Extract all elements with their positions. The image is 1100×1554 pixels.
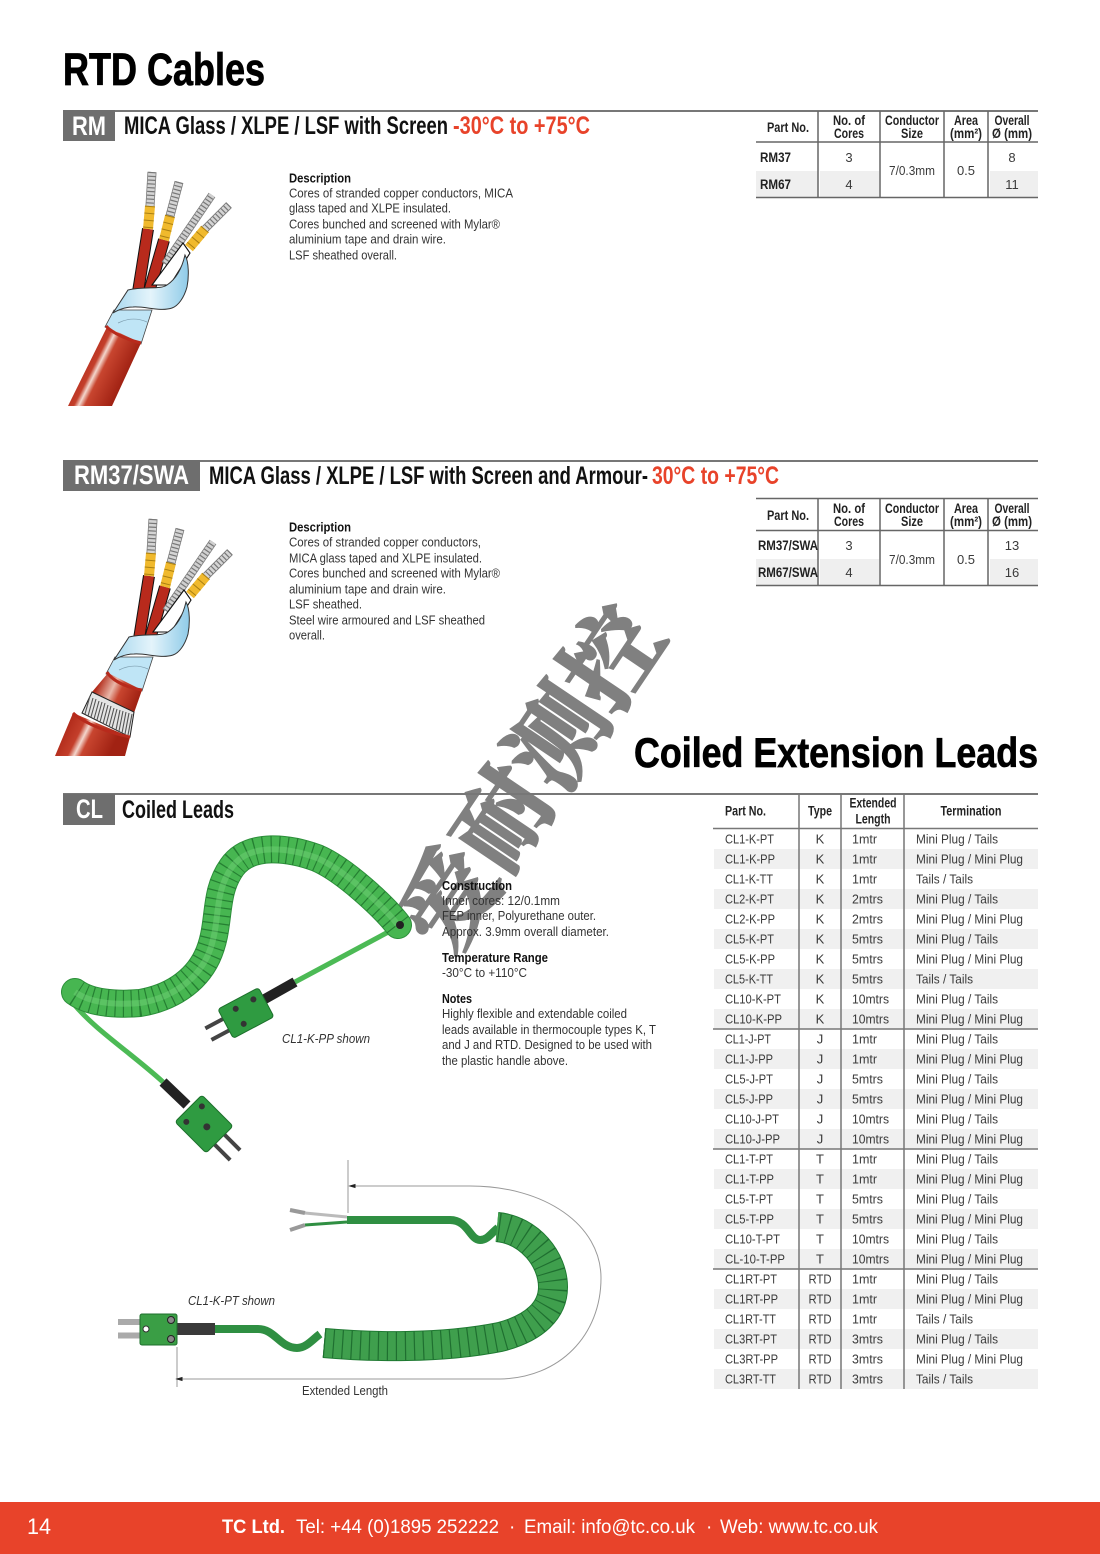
table rows: Mini Plug / Tails (916, 931, 998, 946)
table: RM37/SWA: Conductor (885, 501, 940, 516)
description: RM37/SWA: aluminium tape and drain wire. (289, 582, 446, 596)
table rows: RTD (808, 1371, 832, 1386)
table rows: Mini Plug / Mini Plug (916, 1131, 1023, 1146)
table: RM37/SWA: Size (901, 514, 923, 529)
table rows: Mini Plug / Tails (916, 1231, 998, 1246)
connector: upper plug (200, 988, 274, 1048)
description: CL: Temperature Range (442, 950, 548, 965)
table rows: Mini Plug / Tails (916, 891, 998, 906)
table: RM37/SWA: No. of (833, 501, 865, 516)
table rows: 5mtrs (852, 1071, 883, 1086)
table rows: Tails / Tails (916, 971, 973, 986)
table: RM: Ø (mm) (992, 126, 1032, 141)
table: RM: RM67 (760, 177, 791, 192)
description: RM37/SWA: MICA glass taped and XLPE insulated. (289, 550, 482, 566)
table rows: CL1-T-PP (725, 1171, 774, 1186)
table rows: T (816, 1151, 824, 1166)
table rows: K (816, 931, 825, 946)
table: RM: Overall (994, 113, 1030, 128)
table rows: 1mtr (852, 831, 878, 846)
section header: RM: MICA Glass / XLPE / LSF with Screen (124, 112, 448, 140)
description: RM: Cores bunched and screened with Mylar® (289, 216, 500, 232)
table rows: Mini Plug / Mini Plug (916, 1251, 1023, 1266)
description: CL: Construction (442, 878, 512, 893)
description: RM: Cores of stranded copper conductors, MICA (289, 186, 513, 200)
description: RM (289, 170, 513, 262)
table rows: T (816, 1191, 824, 1206)
footer bar: Email: info@tc.co.uk (524, 1517, 695, 1538)
table rows: T (816, 1171, 824, 1186)
table rows: RTD (808, 1331, 832, 1346)
table rows: CL2-K-PP (725, 911, 775, 926)
table rows: 10mtrs (852, 1111, 889, 1126)
footer bar (0, 1502, 1100, 1554)
table: RM: 3 (845, 150, 853, 165)
footer bar: 14 (27, 1514, 51, 1539)
table rows: CL5-J-PP (725, 1091, 773, 1106)
table: RM37/SWA: 7/0.3mm (889, 552, 935, 567)
table: RM37/SWA: Area (954, 501, 978, 516)
description: CL: and J and RTD. Designed to be used with (442, 1037, 652, 1052)
table: RM (756, 111, 1038, 198)
table rows: 10mtrs (852, 1251, 889, 1266)
table: RM: Cores (834, 126, 864, 141)
description: CL: Highly flexible and extendable coiled (442, 1006, 627, 1021)
table rows: K (816, 871, 825, 886)
table rows: K (816, 971, 825, 986)
label: Extended Length: Extended Length (302, 1383, 388, 1398)
description: RM: LSF sheathed overall. (289, 248, 397, 262)
table rows: RTD (808, 1311, 832, 1326)
table rows: CL1-K-PP (725, 851, 775, 866)
table: RM: No. of (833, 113, 865, 128)
table rows: CL10-J-PP (725, 1131, 780, 1146)
section header: RM37/SWA: 30°C to +75°C (652, 462, 779, 490)
description: CL: the plastic handle above. (442, 1053, 568, 1068)
coil (324, 1227, 553, 1346)
table: RM: Conductor (885, 113, 940, 128)
section header: CL: CL (76, 794, 103, 824)
table rows: CL-10-T-PP (725, 1251, 785, 1266)
table rows: 5mtrs (852, 1211, 883, 1226)
table: RM: Size (901, 126, 923, 141)
table rows: 1mtr (852, 1051, 878, 1066)
description: RM: aluminium tape and drain wire. (289, 232, 446, 246)
diagram: coiled lead CL1-K-PT with extended length dimension (118, 1160, 601, 1387)
table rows: Mini Plug / Tails (916, 1331, 998, 1346)
table rows: RTD (808, 1351, 832, 1366)
table: RM37/SWA: RM37/SWA (758, 538, 818, 553)
table rows: CL3RT-PP (725, 1351, 778, 1366)
table: RM: 8 (1008, 150, 1016, 165)
description: CL: Approx. 3.9mm overall diameter. (442, 924, 609, 939)
table rows: 5mtrs (852, 1091, 883, 1106)
table rows: K (816, 1011, 825, 1026)
table rows: 3mtrs (852, 1331, 883, 1346)
description: CL (442, 878, 656, 1068)
table header (725, 795, 1002, 826)
connector: lower plug (175, 1095, 249, 1169)
table: RM37/SWA: (mm²) (950, 514, 982, 529)
section header: CL: Coiled Leads (122, 796, 234, 824)
table rows: Mini Plug / Mini Plug (916, 1211, 1023, 1226)
table: RM37/SWA: 0.5 (957, 552, 975, 567)
table rows: Mini Plug / Mini Plug (916, 1011, 1023, 1026)
table rows: CL1-J-PT (725, 1031, 771, 1046)
caption: CL1-K-PP shown: CL1-K-PP shown (282, 1031, 370, 1046)
table: RM: 4 (845, 177, 853, 192)
table rows: CL5-K-PP (725, 951, 775, 966)
table rows: 5mtrs (852, 1191, 883, 1206)
section header: RM37/SWA: RM37/SWA (74, 460, 189, 490)
table rows: 1mtr (852, 851, 878, 866)
table: RM37/SWA: 3 (845, 538, 853, 553)
title: RTD Cables: RTD Cables (63, 44, 265, 95)
table header: Type (808, 803, 832, 818)
footer bar: Web: www.tc.co.uk (720, 1517, 878, 1538)
table rows: Mini Plug / Mini Plug (916, 1351, 1023, 1366)
illustration: RM37/SWA armoured cable (55, 519, 230, 756)
table rows: 1mtr (852, 1171, 878, 1186)
caption: CL1-K-PT shown: CL1-K-PT shown (188, 1293, 275, 1308)
description: CL: Inner cores: 12/0.1mm (442, 893, 560, 908)
table rows: RTD (808, 1271, 832, 1286)
section header: RM: RM (72, 111, 106, 141)
row shading (714, 849, 1038, 1389)
table rows: Mini Plug / Mini Plug (916, 1051, 1023, 1066)
table: RM: 0.5 (957, 163, 975, 178)
table rows: Mini Plug / Tails (916, 1031, 998, 1046)
table rows: CL1RT-PP (725, 1291, 778, 1306)
table rows: J (817, 1051, 823, 1066)
table rows: T (816, 1251, 824, 1266)
table rows: Mini Plug / Tails (916, 1151, 998, 1166)
table rows: 10mtrs (852, 991, 889, 1006)
heading: Coiled Extension Leads: Coiled Extension Leads (634, 729, 1038, 776)
table rows: 5mtrs (852, 951, 883, 966)
table header: Termination (940, 803, 1002, 818)
tails (305, 1213, 347, 1217)
table: RM37/SWA: Cores (834, 514, 864, 529)
table rows: 2mtrs (852, 911, 883, 926)
table rows: CL3RT-PT (725, 1331, 777, 1346)
table rows: K (816, 951, 825, 966)
table: RM37/SWA: RM67/SWA (758, 565, 818, 580)
table rows: 3mtrs (852, 1351, 883, 1366)
footer bar: · (706, 1517, 712, 1538)
table: RM37/SWA: 4 (845, 565, 853, 580)
table rows: CL10-J-PT (725, 1111, 779, 1126)
table: RM: RM37 (760, 150, 791, 165)
table rows: Mini Plug / Tails (916, 1111, 998, 1126)
table header: Length (856, 811, 890, 826)
section header: RM: -30°C to +75°C (453, 112, 590, 140)
table rows: CL5-K-PT (725, 931, 774, 946)
table rows: 1mtr (852, 1311, 878, 1326)
table rows: Tails / Tails (916, 871, 973, 886)
table rows: K (816, 851, 825, 866)
table rows: J (817, 1111, 823, 1126)
table rows: CL1RT-PT (725, 1271, 777, 1286)
table rows: Mini Plug / Tails (916, 831, 998, 846)
table: RM37/SWA: Overall (994, 501, 1030, 516)
table rows: 10mtrs (852, 1231, 889, 1246)
table rows: CL3RT-TT (725, 1371, 776, 1386)
table rows: Tails / Tails (916, 1371, 973, 1386)
footer bar: TC Ltd. (222, 1517, 285, 1538)
table rows: CL1-J-PP (725, 1051, 773, 1066)
description: RM37/SWA: LSF sheathed. (289, 596, 362, 612)
table: CL coiled leads (713, 794, 1038, 1389)
table rows: 1mtr (852, 1271, 878, 1286)
table rows: Mini Plug / Tails (916, 1191, 998, 1206)
table rows: Mini Plug / Mini Plug (916, 1171, 1023, 1186)
description: CL: -30°C to +110°C (442, 965, 527, 980)
table rows: Tails / Tails (916, 1311, 973, 1326)
table rows (725, 831, 1023, 1386)
table rows: CL10-T-PT (725, 1231, 780, 1246)
table rows: CL1-T-PT (725, 1151, 773, 1166)
table rows: 1mtr (852, 1151, 878, 1166)
table: RM37/SWA: 13 (1005, 538, 1019, 553)
table rows: K (816, 891, 825, 906)
table rows: 1mtr (852, 1031, 878, 1046)
table: RM37/SWA: Part No. (767, 508, 809, 523)
table rows: K (816, 911, 825, 926)
table: RM37/SWA (756, 498, 1038, 586)
table rows: Mini Plug / Tails (916, 1271, 998, 1286)
table: RM: 7/0.3mm (889, 163, 935, 178)
table rows: RTD (808, 1291, 832, 1306)
table rows: Mini Plug / Mini Plug (916, 911, 1023, 926)
table rows: J (817, 1031, 823, 1046)
description: CL: FEP inner, Polyurethane outer. (442, 908, 596, 923)
table rows: CL1-K-PT (725, 831, 774, 846)
watermark: 爱耐测控 (360, 576, 691, 974)
table rows: Mini Plug / Tails (916, 1071, 998, 1086)
table: RM37/SWA: 16 (1005, 565, 1019, 580)
table: RM: Part No. (767, 120, 809, 135)
table rows: J (817, 1091, 823, 1106)
table rows: 10mtrs (852, 1011, 889, 1026)
table rows: T (816, 1211, 824, 1226)
description: RM37/SWA: Cores of stranded copper conductors, (289, 534, 481, 550)
table rows: CL1RT-TT (725, 1311, 776, 1326)
description: RM37/SWA (289, 520, 500, 642)
description: RM: glass taped and XLPE insulated. (289, 200, 451, 216)
footer bar: Tel: +44 (0)1895 252222 (296, 1517, 499, 1538)
table: RM37/SWA: Ø (mm) (992, 514, 1032, 529)
illustration: RM cable (68, 172, 229, 406)
table rows: Mini Plug / Mini Plug (916, 1091, 1023, 1106)
description: RM: Description (289, 170, 351, 186)
table rows: CL1-K-TT (725, 871, 773, 886)
plug (118, 1314, 177, 1345)
section header: RM37/SWA (63, 460, 1038, 491)
table rows: Mini Plug / Mini Plug (916, 951, 1023, 966)
table rows: J (817, 1131, 823, 1146)
description: CL: Notes (442, 991, 472, 1006)
table rows: CL5-T-PT (725, 1191, 773, 1206)
dimension line (177, 1160, 601, 1387)
table rows: Mini Plug / Mini Plug (916, 851, 1023, 866)
table rows: 5mtrs (852, 931, 883, 946)
table: RM: 11 (1005, 177, 1019, 192)
table rows: CL10-K-PP (725, 1011, 782, 1026)
table rows: J (817, 1071, 823, 1086)
footer bar: · (509, 1517, 515, 1538)
table rows: CL2-K-PT (725, 891, 774, 906)
description: CL: leads available in thermocouple types K, T (442, 1022, 656, 1037)
section header: RM37/SWA: MICA Glass / XLPE / LSF with Screen and Armour- (209, 462, 648, 490)
leads (347, 1220, 498, 1240)
table rows: 1mtr (852, 1291, 878, 1306)
section header: CL (63, 793, 1038, 825)
table rows: T (816, 1231, 824, 1246)
table: RM: Area (954, 113, 978, 128)
section header: RM (63, 110, 1038, 141)
description: RM37/SWA: overall. (289, 628, 325, 642)
table rows: Mini Plug / Mini Plug (916, 1291, 1023, 1306)
description: RM37/SWA: Steel wire armoured and LSF sheathed (289, 612, 485, 628)
table rows: Mini Plug / Tails (916, 991, 998, 1006)
table rows: 1mtr (852, 871, 878, 886)
table rows: CL5-T-PP (725, 1211, 774, 1226)
description: RM37/SWA: Description (289, 520, 351, 534)
table rows: CL5-K-TT (725, 971, 773, 986)
table rows: K (816, 991, 825, 1006)
table: RM: (mm²) (950, 126, 982, 141)
table header: Extended (850, 795, 896, 810)
table rows: CL10-K-PT (725, 991, 781, 1006)
table rows: 3mtrs (852, 1371, 883, 1386)
table rows: 5mtrs (852, 971, 883, 986)
description: RM37/SWA: Cores bunched and screened with Mylar® (289, 566, 500, 580)
table rows: 2mtrs (852, 891, 883, 906)
table header: Part No. (725, 803, 766, 818)
table rows: 10mtrs (852, 1131, 889, 1146)
table rows: K (816, 831, 825, 846)
table rows: CL5-J-PT (725, 1071, 773, 1086)
photo: coiled lead CL1-K-PP (73, 849, 404, 1169)
